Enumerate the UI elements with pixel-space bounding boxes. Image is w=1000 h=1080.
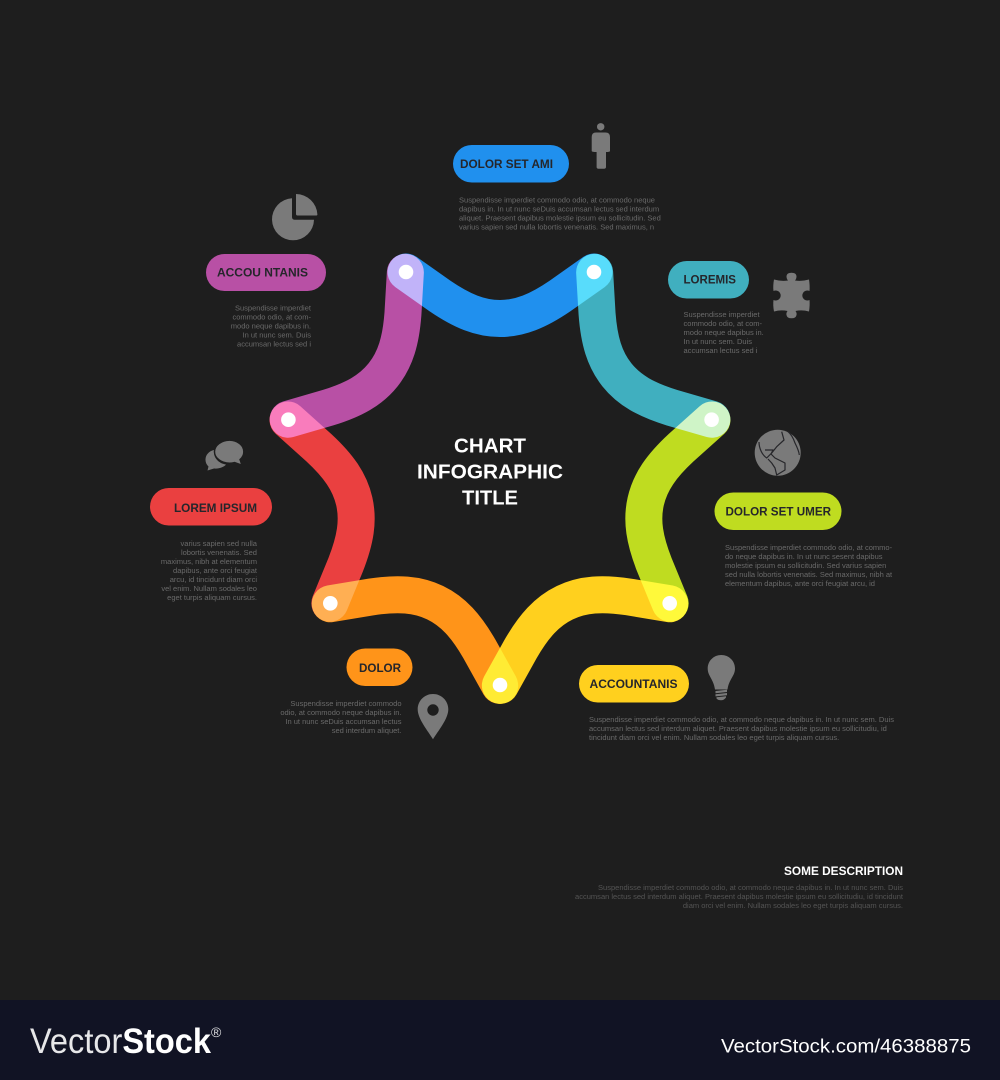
- title: CHART: [454, 434, 526, 458]
- icon: speech bubbles: [206, 440, 244, 470]
- segment: purple: [288, 272, 442, 448]
- label pill: LOREM IPSUM: [174, 501, 257, 515]
- segment: blue: [406, 272, 594, 318]
- registered mark: ®: [211, 1024, 222, 1040]
- text block: maximus, nibh at elementum: [161, 557, 257, 566]
- text block: odio, at commodo neque dapibus in.: [280, 708, 402, 717]
- icon: globe: [755, 430, 801, 476]
- panel: dolor set ami: [453, 123, 661, 232]
- description text: accumsan lectus sed interdum aliquet. Praesent dapibus molestie ipsum eu sollicitudiu, id tincidunt: [575, 892, 904, 901]
- label pill: DOLOR SET AMI: [460, 157, 553, 171]
- description text: [575, 883, 904, 910]
- text block: varius sapien sed nulla lobortis venenatis. Sed maximus, n: [459, 222, 654, 232]
- text block: do neque dapibus in. In ut nunc sesent dapibus: [725, 552, 883, 561]
- text block: modo neque dapibus in.: [231, 322, 311, 331]
- text block: lobortis venenatis. Sed: [181, 548, 257, 557]
- text block: In ut nunc sem. Duis: [684, 337, 752, 346]
- icon: map pin: [418, 694, 448, 739]
- panel: loremis: [668, 261, 810, 355]
- text block: molestie ipsum eu sollicitudin. Sed varius sapien: [725, 561, 886, 570]
- label pill: ACCOUNTANIS: [590, 677, 678, 691]
- text block: [589, 715, 894, 742]
- text block: In ut nunc seDuis accumsan lectus: [285, 717, 402, 726]
- text block: [231, 304, 312, 349]
- icon: light bulb: [708, 655, 735, 700]
- text block: [459, 196, 661, 232]
- text block: accumsan lectus sed i: [237, 340, 311, 349]
- label pill: [579, 665, 689, 702]
- text block: modo neque dapibus in.: [684, 328, 764, 337]
- watermark bar: [0, 1000, 1000, 1080]
- text block: aliquet. Praesent dapibus molestie ipsum eu sollicitudin. Sed: [459, 214, 661, 222]
- text block: [161, 539, 258, 602]
- text block: dapibus, ante orci feugiat: [173, 566, 258, 575]
- text block: arcu, id tincidunt diam orci: [170, 575, 257, 584]
- text block: Suspendisse imperdiet commodo: [290, 699, 402, 708]
- panel: lorem ipsum: [150, 440, 272, 602]
- seven-segment ring chart: [288, 272, 712, 685]
- text block: [725, 543, 893, 588]
- title: TITLE: [462, 486, 518, 510]
- segment: teal: [558, 272, 712, 448]
- description text: diam orci vel enim. Nullam sodales leo eget turpis aliquam cursus.: [683, 901, 903, 910]
- label pill: ACCOU NTANIS: [217, 266, 308, 280]
- label pill: [668, 261, 749, 298]
- segment: yellow: [480, 562, 670, 685]
- description heading: SOME DESCRIPTION: [784, 866, 903, 878]
- text block: Suspendisse imperdiet commodo odio, at commo-: [725, 543, 893, 552]
- description text: Suspendisse imperdiet commodo odio, at commodo neque dapibus in. In ut nunc sem. Duis: [598, 883, 903, 892]
- text block: varius sapien sed nulla: [181, 539, 258, 548]
- text block: tincidunt diam orci vel enim. Nullam sodales leo eget turpis aliquam cursus.: [589, 733, 839, 742]
- panel: accountanis: [579, 655, 894, 742]
- text block: [280, 699, 402, 735]
- title: [417, 434, 563, 510]
- label pill: DOLOR: [359, 661, 401, 675]
- text block: dapibus in. In ut nunc seDuis accumsan lectus sed interdum: [459, 204, 659, 214]
- segment: orange: [330, 562, 520, 685]
- text block: sed nulla lobortis venenatis. Sed maximus, nibh at: [725, 570, 893, 579]
- text block: accumsan lectus sed i: [684, 346, 758, 355]
- label pill: [346, 648, 412, 686]
- label pill: [150, 488, 272, 526]
- ring node dots: [281, 265, 719, 692]
- text block: Suspendisse imperdiet commodo odio, at commodo neque: [459, 196, 655, 204]
- text block: commodo odio, at com-: [232, 313, 311, 322]
- label pill: LOREMIS: [684, 272, 736, 286]
- segment: red: [288, 410, 375, 603]
- text block: Suspendisse imperdiet: [235, 304, 312, 313]
- text block: vel enim. Nullam sodales leo: [161, 584, 257, 593]
- panel: some description: [575, 866, 904, 910]
- text block: commodo odio, at com-: [684, 319, 763, 328]
- image id: VectorStock.com/46388875: [721, 1036, 971, 1058]
- logo wordmark: VectorStock: [30, 1022, 211, 1061]
- icon: pie chart: [272, 194, 317, 240]
- panel: dolor set umer: [714, 430, 893, 588]
- text block: sed interdum aliquet.: [332, 726, 402, 735]
- label pill: DOLOR SET UMER: [726, 504, 831, 518]
- text block: [684, 310, 764, 355]
- segment: lime: [625, 410, 712, 603]
- text block: eget turpis aliquam cursus.: [167, 593, 257, 602]
- label pill: [453, 145, 569, 182]
- panel: dolor: [280, 648, 448, 739]
- text block: accumsan lectus sed interdum aliquet. Praesent dapibus molestie ipsum eu sollicitudiu, id: [589, 724, 887, 733]
- text block: elementum dapibus, ante orci feugiat arcu, id: [725, 579, 875, 588]
- text block: In ut nunc sem. Duis: [242, 331, 311, 340]
- text block: Suspendisse imperdiet commodo odio, at commodo neque dapibus in. In ut nunc sem. Duis: [589, 715, 894, 724]
- label pill: [206, 254, 326, 291]
- text block: Suspendisse imperdiet: [684, 310, 760, 319]
- icon: person: [592, 123, 610, 169]
- icon: puzzle piece: [773, 273, 810, 318]
- title: INFOGRAPHIC: [417, 460, 563, 484]
- panel: accou ntanis: [206, 194, 326, 349]
- label pill: [714, 492, 842, 530]
